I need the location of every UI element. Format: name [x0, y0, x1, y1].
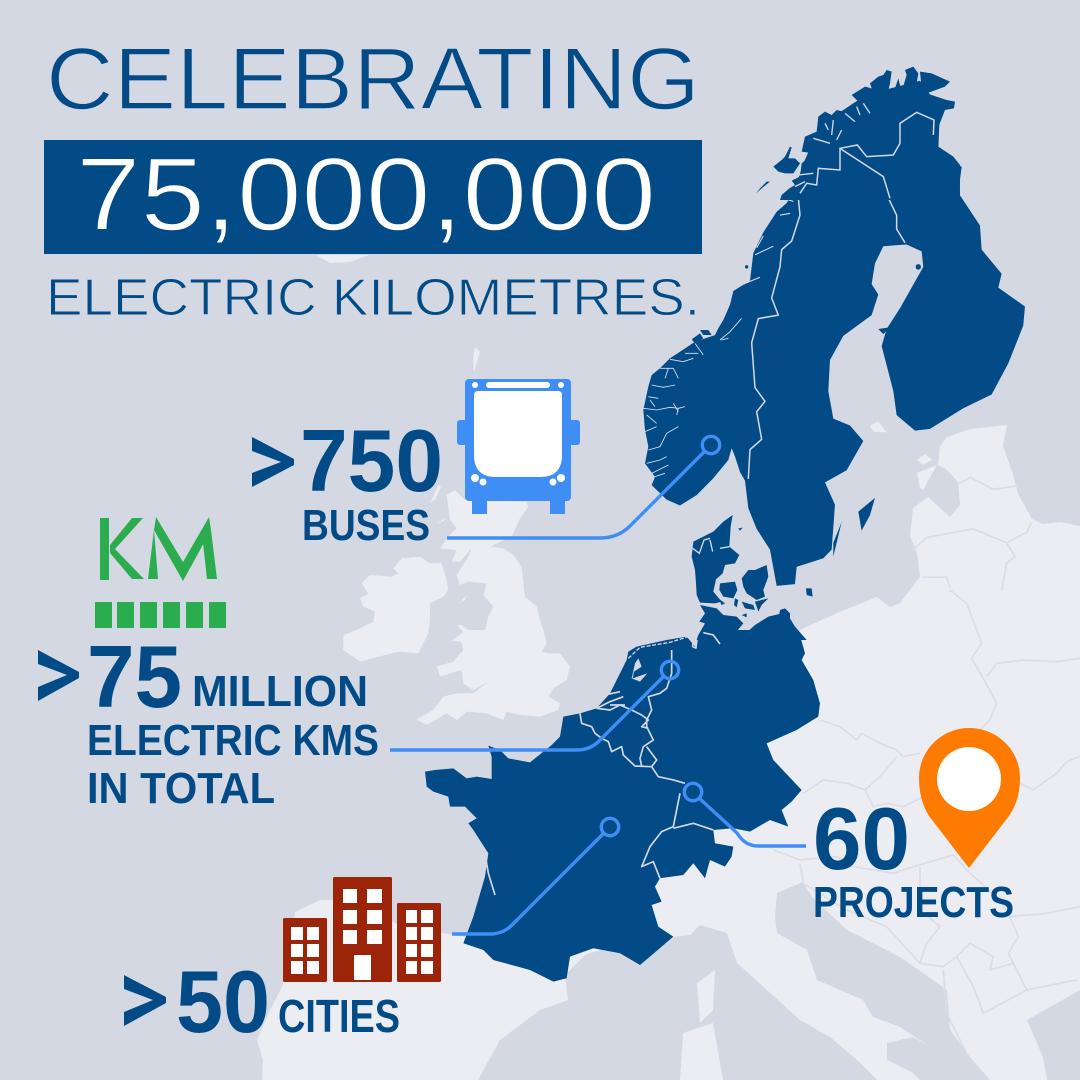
small islands	[431, 485, 467, 603]
stat: cities: 50	[176, 952, 270, 1051]
Ireland	[343, 557, 448, 662]
icon: location pin	[919, 728, 1020, 868]
stat: electric kilometres: MILLION	[192, 667, 368, 716]
Aland islands	[870, 421, 887, 432]
stat: electric kilometres	[38, 627, 379, 813]
seas	[478, 882, 1080, 1080]
fjords	[795, 103, 870, 187]
France and Switzerland borders	[485, 633, 720, 895]
line to Germany	[684, 783, 806, 846]
stat: projects	[813, 789, 1014, 927]
Limfjord	[693, 538, 729, 553]
map of Europe	[257, 67, 1080, 1080]
icon: six green bars	[95, 602, 226, 628]
stat: cities	[124, 952, 400, 1051]
stat: electric kilometres: ELECTRIC KMS	[87, 716, 379, 765]
stat: cities: CITIES	[278, 990, 400, 1042]
icon: city buildings	[283, 877, 441, 982]
icon: bus	[457, 379, 580, 514]
Benelux borders	[580, 637, 697, 783]
border redrawn over the northern coast	[800, 112, 934, 198]
dark: France, Benelux, Germany	[425, 617, 820, 982]
Norway–Sweden–Finland borders	[748, 113, 935, 479]
line to Netherlands	[390, 661, 679, 750]
stat: electric kilometres: 75	[87, 627, 182, 726]
Great Britain	[417, 490, 570, 725]
stat: buses: BUSES	[302, 501, 430, 550]
IJsselmeer	[632, 658, 647, 682]
headline number: 75,000,000	[76, 137, 656, 253]
greater-than sign	[252, 437, 294, 487]
headline banner	[44, 137, 702, 254]
dark: Denmark and northern Germany	[692, 515, 813, 640]
light country borders, Baltic states	[913, 477, 1032, 591]
central Norway fjords	[743, 198, 793, 284]
light country borders, central and eastern Europe	[773, 590, 1080, 1053]
stat: projects: PROJECTS	[813, 878, 1014, 927]
stat: buses	[252, 411, 443, 550]
title: CELEBRATING: CELEBRATING	[46, 29, 700, 128]
Baltic islands	[745, 264, 921, 557]
icon: KM logo	[95, 517, 226, 628]
dark: northern Norway coast	[756, 67, 960, 200]
light land: continental Europe	[257, 255, 1080, 1080]
Mediterranean islands	[680, 970, 723, 1080]
subtitle: ELECTRIC KILOMETRES.	[46, 269, 700, 327]
dark: Norway, Sweden and Finland	[643, 81, 1025, 586]
line to Norway	[447, 436, 720, 538]
stat: electric kilometres: IN TOTAL	[87, 764, 275, 813]
Lofoten islands	[756, 147, 800, 193]
line to France	[452, 818, 619, 934]
stat: projects: 60	[813, 789, 910, 888]
dark: southern Norway fjords	[643, 318, 742, 477]
callout lines	[390, 436, 806, 934]
stat: buses: 750	[300, 411, 443, 510]
British Isles	[343, 485, 570, 725]
